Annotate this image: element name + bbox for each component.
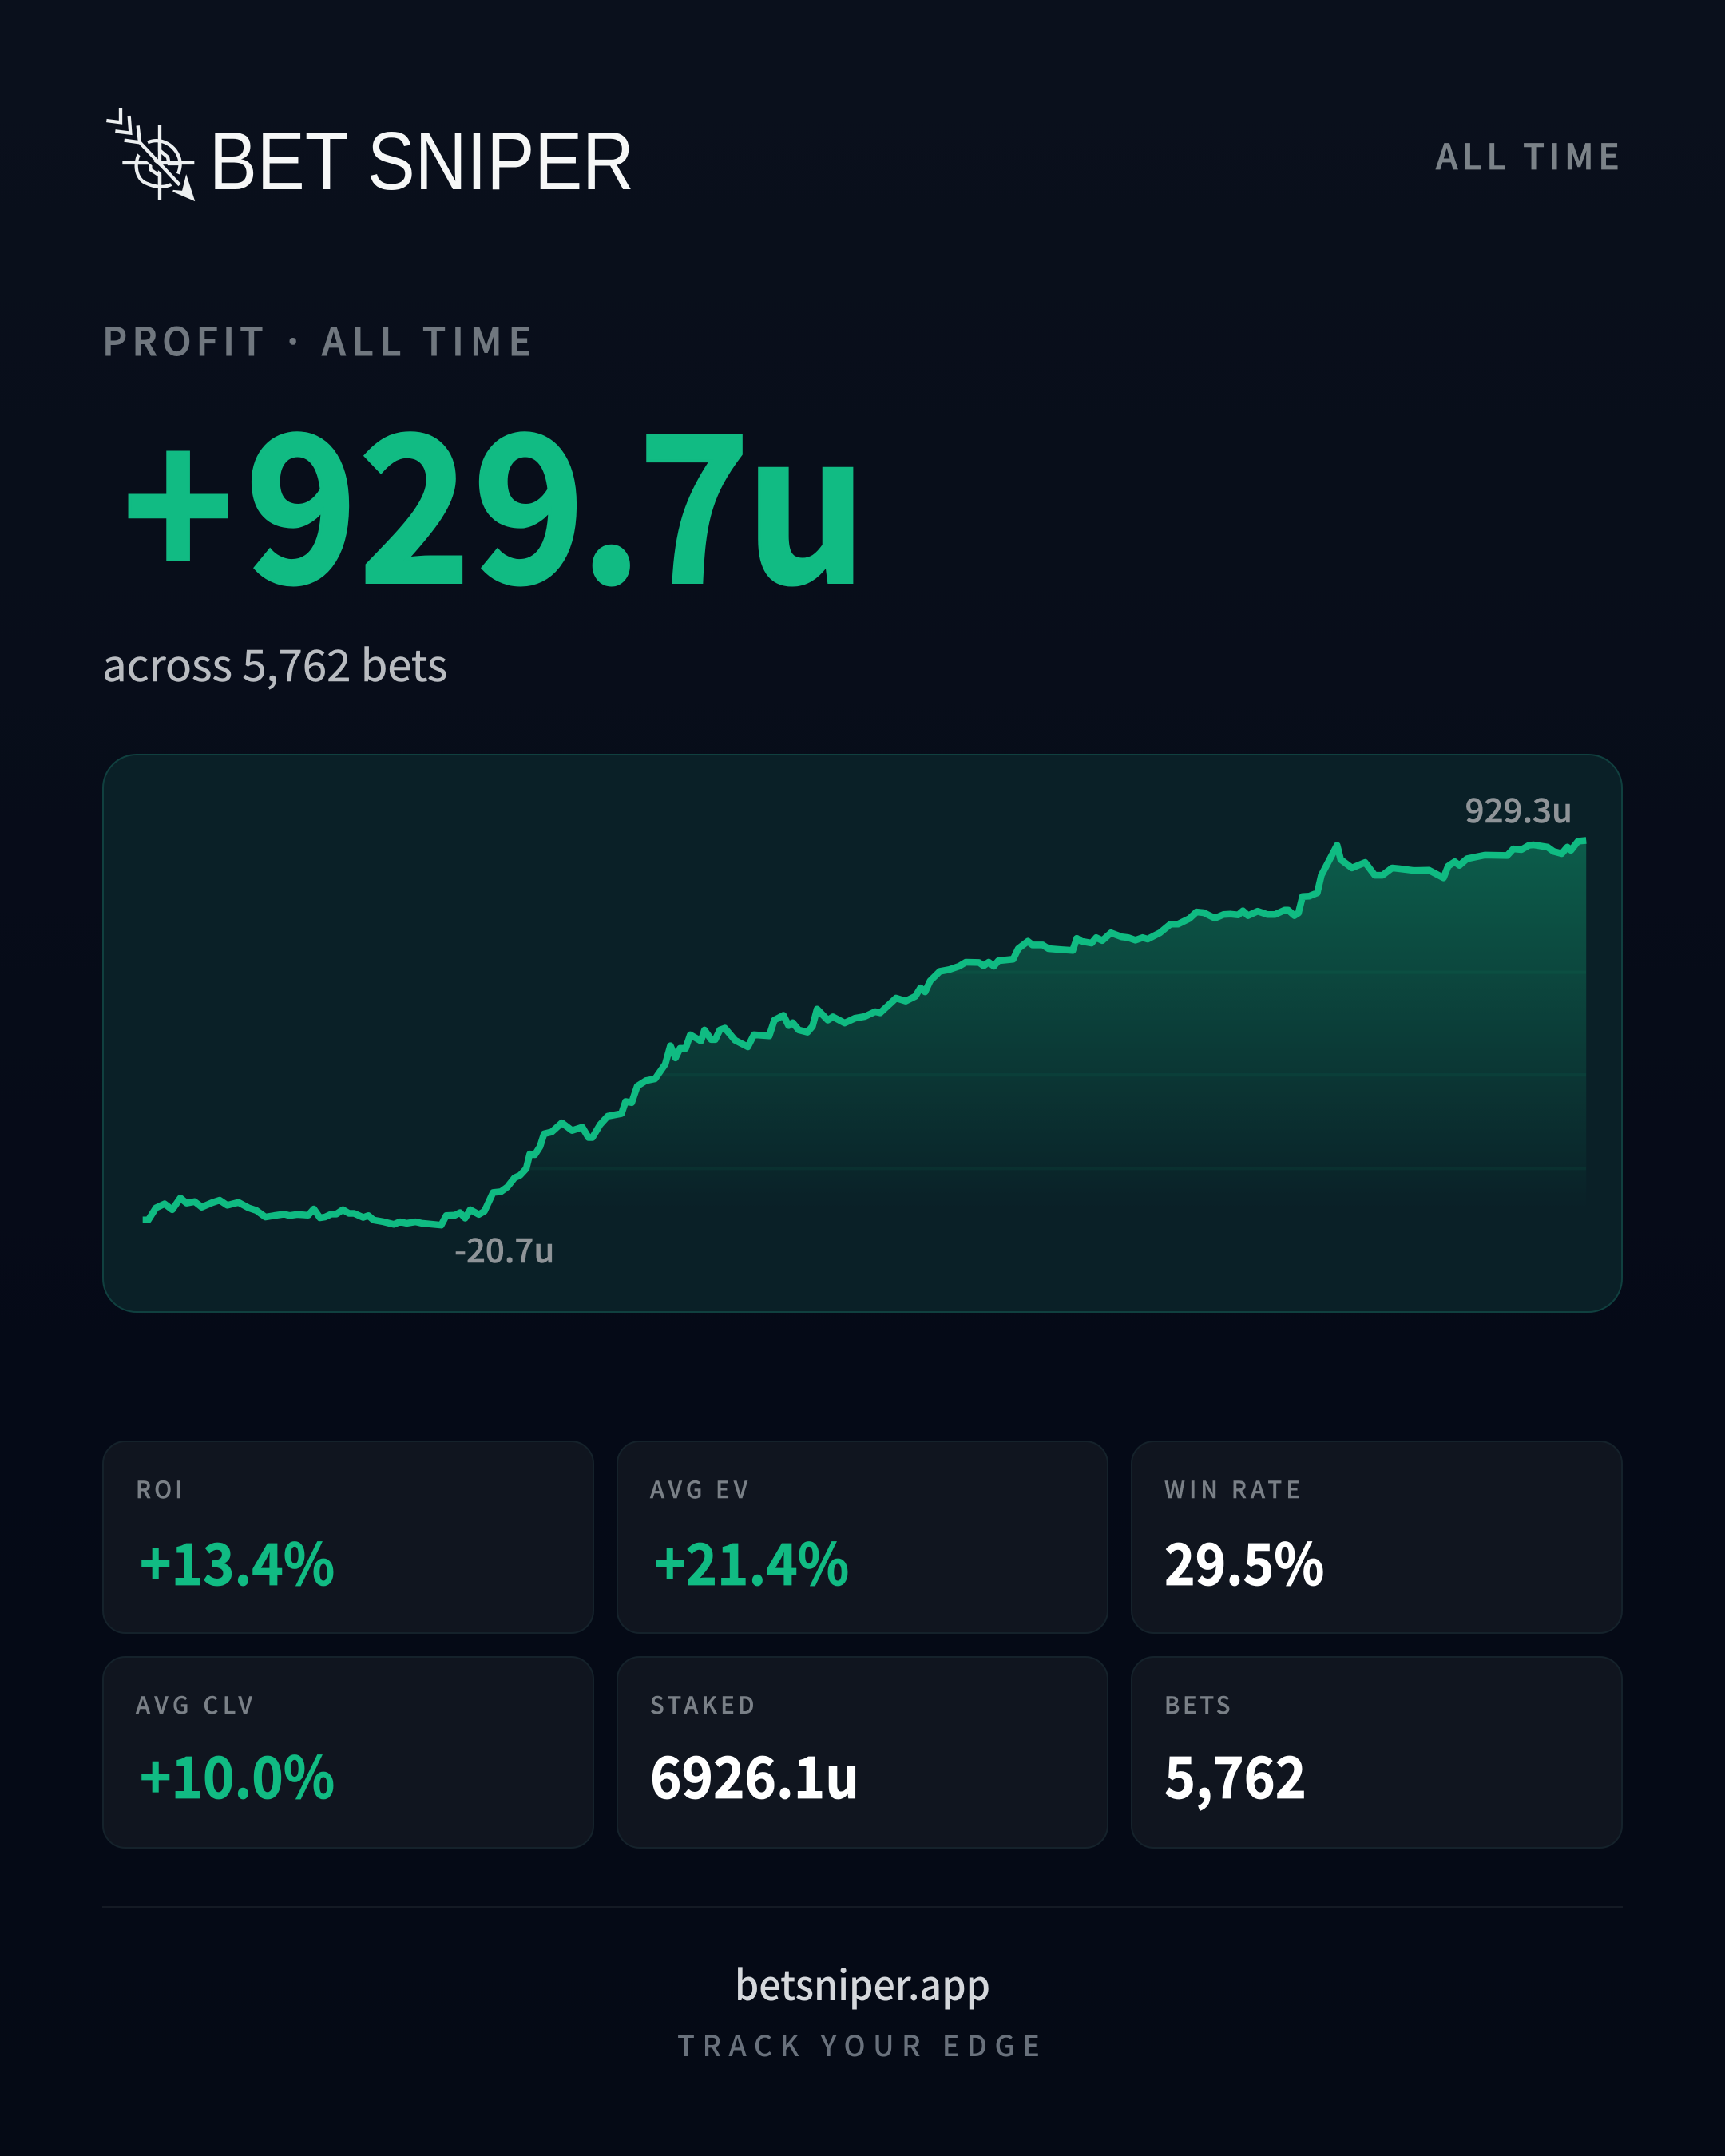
chart low label: -20.7u xyxy=(454,1224,554,1273)
stat card: AVG EV: +21.4% xyxy=(654,1519,849,1603)
stat card: STAKED: STAKED xyxy=(650,1687,758,1721)
period label: ALL TIME xyxy=(1436,129,1624,180)
wordmark: BET SNIPER xyxy=(209,115,634,207)
stat card: BETS: BETS xyxy=(1164,1687,1233,1721)
stat card: AVG CLV: +10.0% xyxy=(140,1732,335,1816)
footer tagline: TRACK YOUR EDGE xyxy=(677,2023,1047,2065)
stat card: BETS xyxy=(1132,1657,1622,1848)
hero label: ALL TIME xyxy=(322,311,537,367)
hero label: PROFIT xyxy=(102,311,268,367)
hero subtext: across 5,762 bets xyxy=(102,631,447,694)
chart: equity curve xyxy=(141,841,1588,1227)
panel: profit chart xyxy=(103,755,1622,1312)
chart high label: 929.3u xyxy=(1465,784,1572,833)
stat card: WIN RATE: WIN RATE xyxy=(1164,1472,1304,1505)
stat card: STAKED xyxy=(617,1657,1108,1848)
stat card: AVG EV xyxy=(617,1441,1108,1633)
stat card: WIN RATE xyxy=(1132,1441,1622,1633)
stat card: WIN RATE: 29.5% xyxy=(1164,1518,1324,1602)
stat card: ROI: +13.4% xyxy=(140,1519,335,1603)
stat card: ROI: ROI xyxy=(136,1472,185,1505)
stat card: AVG CLV: AVG CLV xyxy=(136,1687,257,1721)
stat card: ROI xyxy=(103,1441,593,1633)
stat card: AVG CLV xyxy=(103,1657,593,1848)
hero label: · xyxy=(282,311,304,367)
stat card: AVG EV: AVG EV xyxy=(650,1472,751,1505)
stat card: BETS: 5,762 xyxy=(1164,1732,1307,1815)
hero value: +929.7u xyxy=(122,347,866,640)
logo: Bet Sniper xyxy=(106,108,634,207)
footer site: betsniper.app xyxy=(735,1953,990,2013)
stat card: STAKED: 6926.1u xyxy=(650,1732,859,1816)
icon: crosshair with arrow xyxy=(106,108,194,200)
